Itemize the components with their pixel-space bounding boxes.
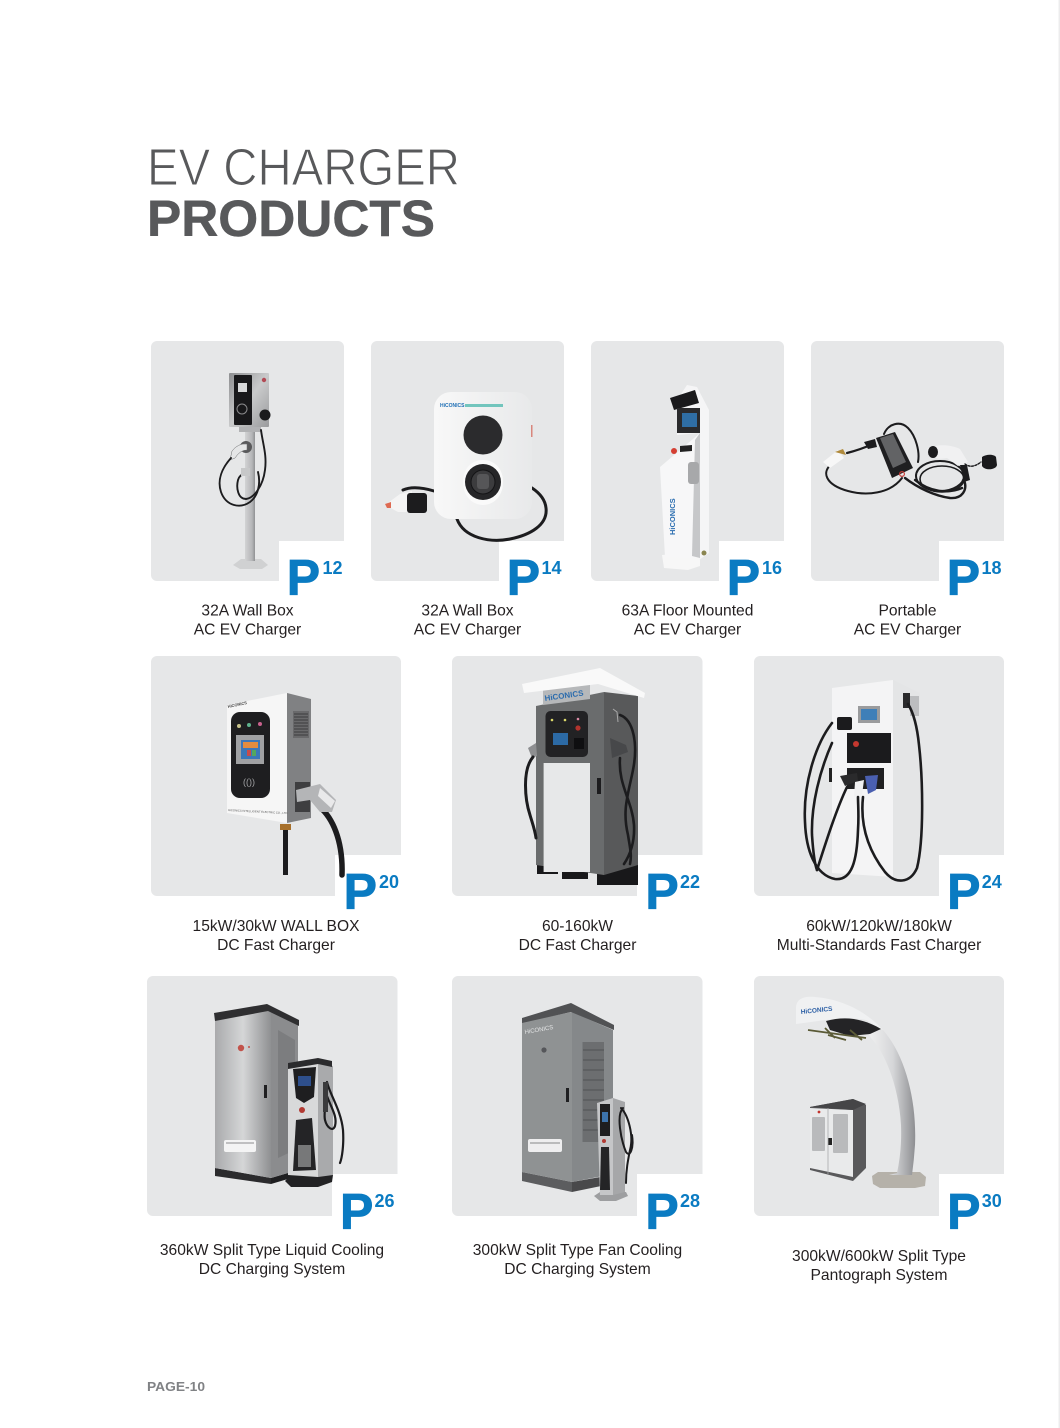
- page reference P20: P: [344, 864, 377, 920]
- caption: DC Charging System: [504, 1261, 651, 1278]
- caption: DC Charging System: [199, 1261, 345, 1278]
- page reference P24: [947, 864, 1002, 920]
- page number: PAGE-10: [147, 1380, 205, 1394]
- icon: white floor mounted charger: HiCONICS: [668, 498, 677, 535]
- caption: Portable: [878, 602, 937, 620]
- page reference P14: [507, 550, 562, 606]
- page reference P24: 24: [982, 872, 1002, 892]
- panel: portable charger: [811, 341, 1005, 638]
- panel: 360kW liquid cooling: [147, 976, 399, 1278]
- caption: 360kW Split Type Liquid Cooling: [160, 1242, 384, 1259]
- caption: [777, 918, 981, 954]
- caption: [854, 602, 961, 638]
- card background: [452, 656, 704, 897]
- page reference P28: P: [645, 1184, 679, 1240]
- caption: AC EV Charger: [414, 622, 521, 638]
- page reference P20: [344, 864, 399, 920]
- caption: [519, 918, 636, 954]
- icon: DC wall box charger: [227, 693, 342, 875]
- caption: [792, 1248, 966, 1284]
- icon: liquid cooling cabinet with dispenser: [214, 1004, 343, 1187]
- panel: 300kW fan cooling: [452, 976, 704, 1278]
- page reference P22: [645, 864, 700, 920]
- caption: 15kW/30kW WALL BOX: [193, 918, 360, 935]
- caption: 60-160kW: [542, 918, 613, 935]
- page reference P12: P: [287, 550, 320, 606]
- panel: pantograph system: [754, 976, 1005, 1284]
- page reference P12: [287, 550, 343, 606]
- caption: 60kW/120kW/180kW: [806, 918, 952, 935]
- card background: [147, 976, 399, 1217]
- page reference P30: [947, 1184, 1002, 1240]
- page reference P16: P: [727, 550, 760, 606]
- title: [147, 139, 460, 247]
- page reference P28: 28: [680, 1191, 700, 1211]
- page reference P20: 20: [379, 872, 399, 892]
- panel: 32A wall box: [371, 341, 565, 638]
- icon: pantograph arm and cabinet: HiCONICS: [800, 1006, 833, 1016]
- caption: [193, 918, 360, 954]
- caption: AC EV Charger: [854, 622, 961, 638]
- page reference P22: 22: [680, 872, 700, 892]
- page reference P14: P: [507, 550, 540, 606]
- page reference P16: 16: [762, 558, 782, 578]
- icon: DC fast charger pedestal: [522, 668, 645, 885]
- page reference P18: 18: [982, 558, 1002, 578]
- card background: [754, 976, 1005, 1217]
- caption: [622, 602, 753, 638]
- icon: fan cooling cabinet with dispenser: HiCONICS: [524, 1025, 554, 1036]
- card background: [452, 976, 704, 1217]
- caption: AC EV Charger: [194, 622, 301, 638]
- icon: portable AC charger with cables: [823, 424, 997, 498]
- icon: DC wall box charger: HiCONICS: [227, 700, 248, 709]
- caption: 300kW Split Type Fan Cooling: [473, 1242, 682, 1259]
- page reference P26: [340, 1184, 395, 1240]
- caption: [473, 1242, 682, 1278]
- panel: 32A wall box on post: [151, 341, 345, 638]
- page reference P26: 26: [374, 1191, 395, 1211]
- title line: EV CHARGER: EV CHARGER: [147, 139, 460, 197]
- caption: DC Fast Charger: [519, 937, 636, 954]
- caption: AC EV Charger: [634, 622, 741, 638]
- page reference P30: 30: [982, 1191, 1002, 1211]
- caption: 63A Floor Mounted: [622, 602, 753, 620]
- panel: 63A floor mounted: [591, 341, 785, 638]
- panel: 60kW/120kW/180kW: [754, 656, 1005, 954]
- icon: post mounted wall box charger: [220, 373, 270, 569]
- icon: white wall box with plug: HiCONICS: [440, 403, 465, 409]
- icon: pantograph arm and cabinet: [796, 997, 926, 1188]
- icon: DC wall box charger: (()): [243, 777, 255, 787]
- page reference P18: [947, 550, 1002, 606]
- page reference P12: 12: [322, 558, 343, 578]
- caption: [160, 1242, 384, 1278]
- caption: 300kW/600kW Split Type: [792, 1248, 966, 1265]
- caption: 32A Wall Box: [201, 602, 294, 620]
- panel: 60-160kW: [452, 656, 704, 954]
- caption: [194, 602, 301, 638]
- page reference P14: 14: [542, 558, 562, 578]
- card background: [591, 341, 785, 582]
- icon: DC fast charger pedestal: HiCONICS: [544, 689, 585, 703]
- page reference P26: P: [340, 1184, 373, 1240]
- icon: multi-standards fast charger: [805, 680, 922, 881]
- icon: white wall box with plug: [385, 392, 546, 540]
- page reference P16: [727, 550, 782, 606]
- icon: DC wall box charger: HICONICS INTELLIGENT ELECTRIC CO., LTD: [228, 808, 287, 815]
- caption: DC Fast Charger: [217, 937, 335, 954]
- card background: [151, 656, 402, 897]
- icon: fan cooling cabinet with dispenser: [522, 1003, 633, 1201]
- page reference P28: [645, 1184, 700, 1240]
- panel: 15kW/30kW wall box: [151, 656, 402, 954]
- card background: [371, 341, 565, 582]
- card background: [151, 341, 345, 582]
- caption: Pantograph System: [811, 1267, 947, 1284]
- page reference P24: P: [947, 864, 980, 920]
- caption: [414, 602, 521, 638]
- page reference P22: P: [645, 864, 679, 920]
- title line: PRODUCTS: PRODUCTS: [147, 190, 435, 247]
- icon: white floor mounted charger: [660, 385, 709, 570]
- card background: [811, 341, 1005, 582]
- caption: Multi-Standards Fast Charger: [777, 937, 981, 954]
- caption: 32A Wall Box: [421, 602, 514, 620]
- card background: [754, 656, 1005, 897]
- page reference P18: P: [947, 550, 980, 606]
- page reference P30: P: [947, 1184, 980, 1240]
